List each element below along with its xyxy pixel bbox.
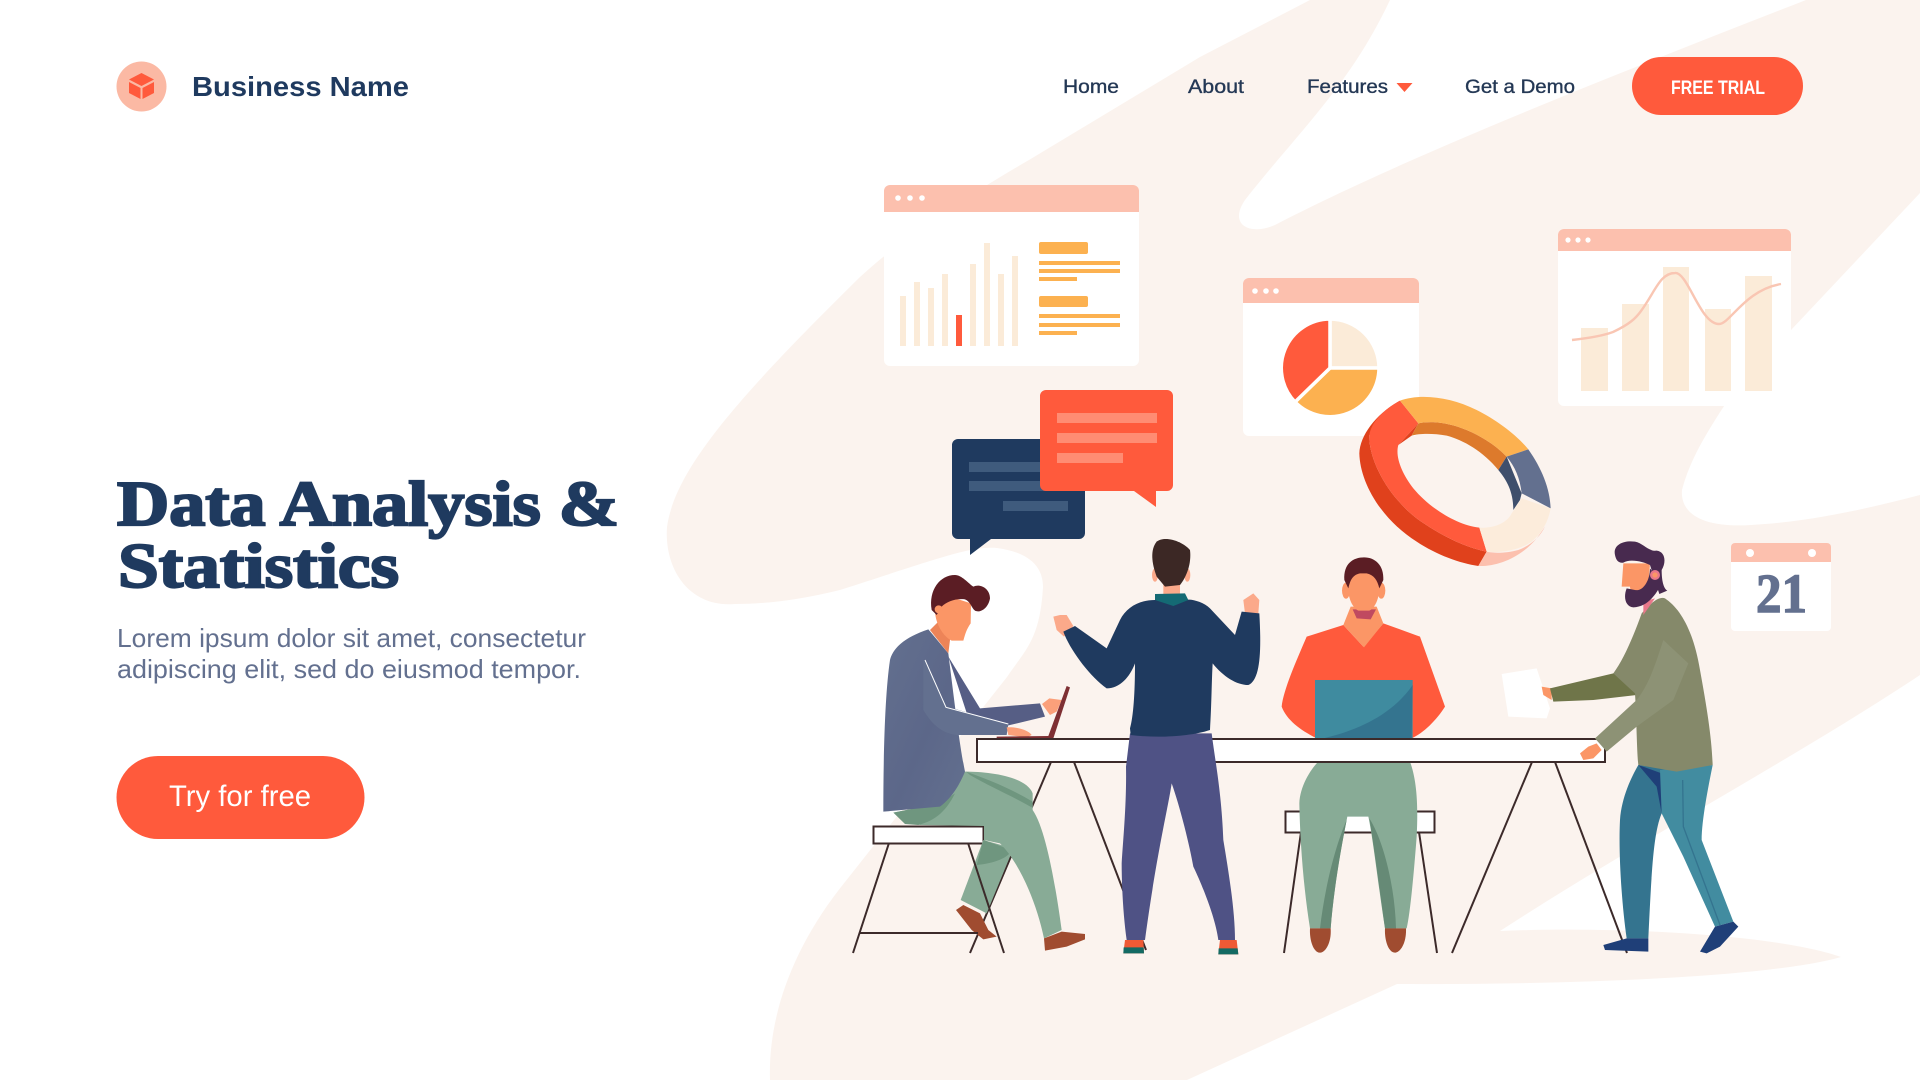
try for free button xyxy=(116,756,364,839)
headline xyxy=(117,468,619,601)
panel: combo chart window xyxy=(1558,229,1791,406)
table top xyxy=(977,739,1605,762)
date number: 21 xyxy=(1756,563,1807,624)
panel: bar chart window xyxy=(884,185,1139,366)
free trial button xyxy=(1632,57,1803,115)
table legs xyxy=(970,762,1627,953)
try for free button: Try for free xyxy=(169,780,311,813)
panel: pie chart window xyxy=(1243,278,1419,436)
bars xyxy=(1581,267,1772,391)
calendar xyxy=(1731,543,1831,631)
person: standing man seen from behind xyxy=(1053,539,1260,954)
free trial button: FREE TRIAL xyxy=(1671,78,1765,99)
person: standing man with beard holding paper xyxy=(1502,541,1738,953)
person: seated man on the left xyxy=(883,575,1085,951)
background blob xyxy=(667,0,1920,1080)
person: seated man facing the viewer xyxy=(1282,557,1445,953)
body text: Lorem ipsum dolor sit amet, consectetur xyxy=(117,623,586,653)
3d donut chart xyxy=(1359,397,1551,566)
bubble: navy xyxy=(952,439,1085,555)
pie chart xyxy=(1281,319,1379,417)
headline: Statistics xyxy=(118,530,399,601)
bubble: orange xyxy=(1040,390,1173,507)
nav: get a demo: Get a Demo xyxy=(1465,76,1575,98)
trend line xyxy=(1572,273,1781,340)
stool left legs xyxy=(853,843,1004,953)
stool left seat xyxy=(874,826,984,844)
logo xyxy=(116,62,409,112)
icon: cube xyxy=(129,73,154,99)
headline: Data Analysis & xyxy=(117,468,619,539)
logo badge xyxy=(116,62,166,112)
icon: dropdown arrow xyxy=(1396,83,1412,92)
bars xyxy=(900,243,1018,346)
nav: features: Features xyxy=(1307,76,1388,98)
body text: adipiscing elit, sed do eiusmod tempor. xyxy=(117,654,581,684)
chat bubbles xyxy=(952,390,1173,555)
legend lines xyxy=(1039,242,1120,335)
business name: Business Name xyxy=(192,71,409,102)
nav: home: Home xyxy=(1063,76,1119,98)
stool right xyxy=(1284,812,1437,953)
nav: about: About xyxy=(1188,76,1245,98)
body text xyxy=(117,623,586,684)
navigation xyxy=(1063,57,1803,115)
